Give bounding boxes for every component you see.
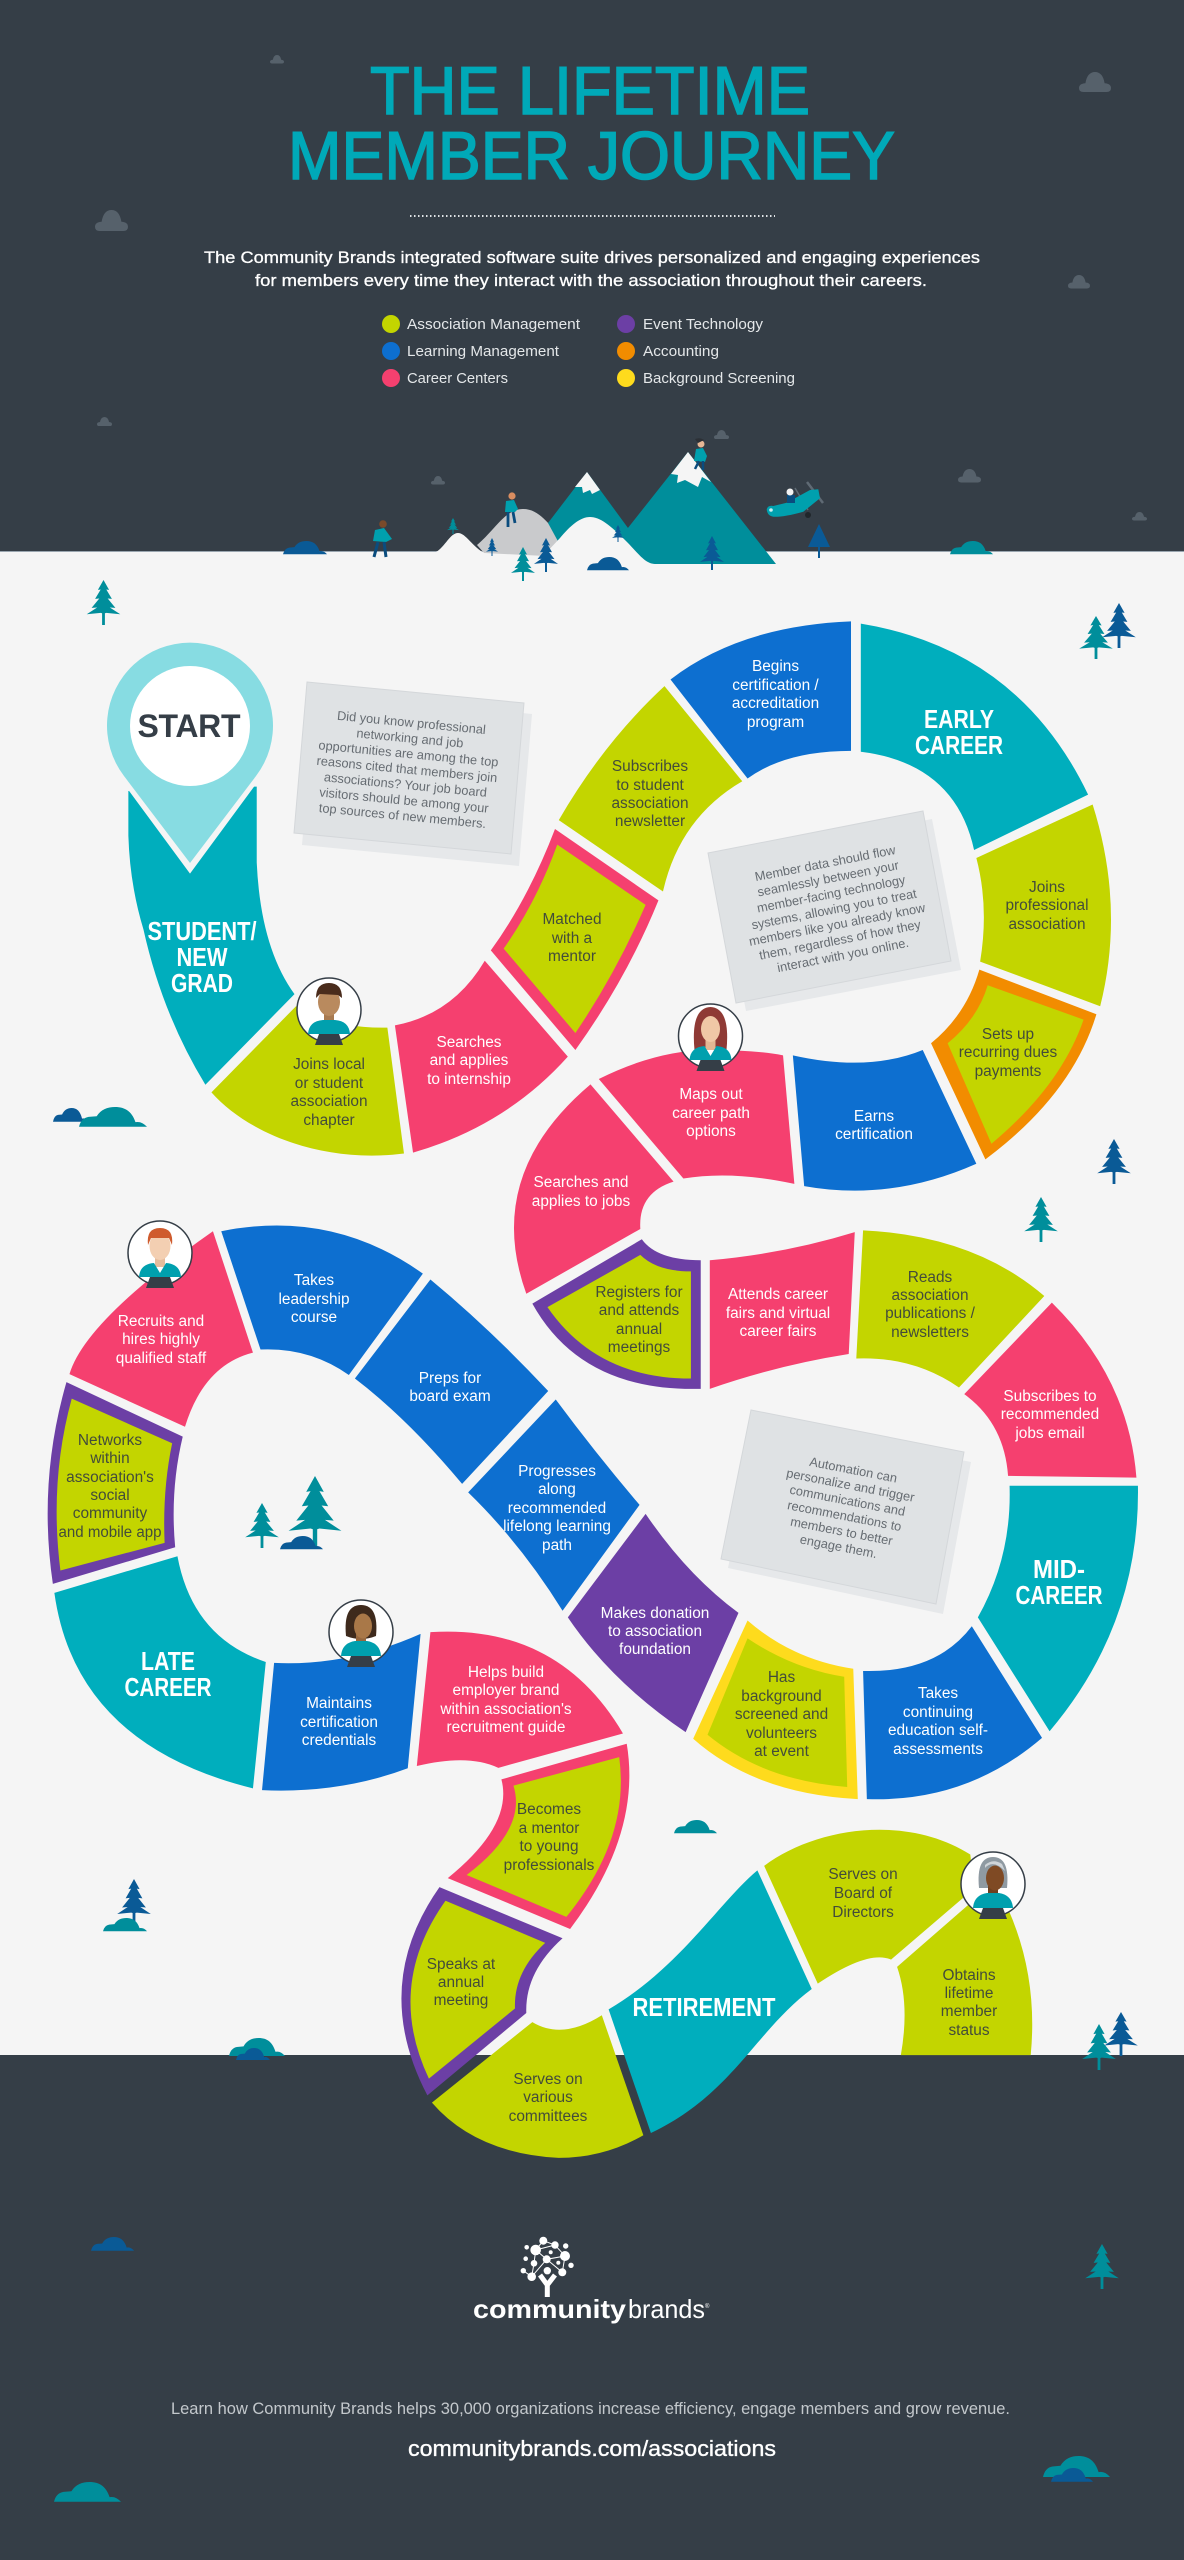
step: subscribes jobs email: jobs email — [1014, 1425, 1085, 1442]
step: helps build employer brand: Helps build — [468, 1664, 544, 1681]
note: professional networking: visitors should be among your — [319, 784, 490, 816]
step: registers annual meetings: annual — [616, 1321, 662, 1338]
step: searches jobs: Searches and — [534, 1174, 628, 1191]
step: background screened: Has — [768, 1669, 795, 1686]
step: begins certification: accreditation — [732, 695, 819, 712]
step: joins professional association: professional — [1006, 897, 1088, 914]
note: automation: communications and — [788, 1482, 907, 1519]
step: searches internship: Searches — [436, 1034, 502, 1051]
field bushes — [53, 1107, 1110, 2502]
step: reads publications: publications / — [885, 1305, 976, 1322]
step: matched with mentor — [491, 829, 658, 1050]
step: becomes a mentor: Becomes — [517, 1801, 581, 1818]
step: networks within community: association's — [66, 1469, 154, 1486]
intro text: The Community Brands integrated software suite drives personalized and engaging experiences — [204, 248, 980, 267]
step: serves on committees: various — [523, 2089, 573, 2106]
stage: early career: CAREER — [915, 730, 1003, 760]
climber on grey hill — [505, 492, 518, 527]
step: progresses learning path — [468, 1400, 640, 1611]
step: serves on board — [764, 1830, 974, 1984]
legend: Career Centers — [407, 370, 508, 387]
note: member data: interact with you online. — [776, 935, 910, 975]
step: serves on committees: Serves on — [513, 2071, 583, 2088]
stage: early career: EARLY — [924, 704, 994, 734]
note: automation: Automation can — [808, 1454, 899, 1486]
step: serves on board: Directors — [832, 1904, 894, 1921]
logo: wordmark: ® — [705, 2303, 710, 2310]
step: joins local chapter: Joins local — [293, 1056, 365, 1073]
logo: wordmark: community — [473, 2294, 627, 2324]
step: takes leadership course: Takes — [294, 1272, 334, 1289]
field trees — [87, 580, 1138, 2289]
start pin: START — [138, 708, 241, 744]
step: registers annual meetings: and attends — [599, 1302, 680, 1319]
note: professional networking: top sources of new members. — [318, 800, 487, 831]
note: member data: seamlessly between your — [756, 857, 901, 899]
note: automation — [721, 1410, 971, 1614]
note: member data: them, regardless of how they — [758, 916, 923, 963]
note: automation: members to better — [789, 1514, 895, 1548]
avatar: red-haired man — [128, 1221, 192, 1288]
intro text: for members every time they interact with the association throughout their careers. — [255, 271, 927, 290]
legend: Association Management — [407, 316, 581, 333]
step: speaks at annual meeting: meeting — [434, 1992, 488, 2009]
start pin — [107, 643, 273, 866]
stage: student / new grad: GRAD — [171, 968, 233, 998]
step: takes continuing education: education self- — [888, 1722, 988, 1739]
step: helps build employer brand — [417, 1632, 623, 1768]
step: makes donation: Makes donation — [601, 1605, 709, 1622]
plane — [767, 482, 823, 518]
step: background screened: at event — [754, 1743, 810, 1760]
step: attends career fairs — [710, 1232, 855, 1389]
step: takes leadership course: leadership — [278, 1291, 350, 1308]
header dark background — [0, 0, 1184, 551]
step: reads publications: association — [892, 1287, 968, 1304]
title: MEMBER JOURNEY — [288, 118, 895, 194]
step: subscribes newsletter: association — [612, 795, 688, 812]
step: reads publications — [856, 1230, 1044, 1387]
dotted divider — [410, 215, 775, 217]
step: subscribes jobs email: Subscribes to — [1003, 1388, 1097, 1405]
intro text — [204, 248, 980, 290]
step: attends career fairs: fairs and virtual — [726, 1305, 830, 1322]
legend: Accounting — [643, 343, 719, 360]
note: member data: members like you already know — [748, 900, 927, 949]
note: member data — [708, 811, 961, 1011]
step: preps for board exam: board exam — [409, 1388, 491, 1405]
step: registers annual meetings — [532, 1239, 701, 1389]
step: background screened: volunteers — [746, 1725, 817, 1742]
step: becomes a mentor: professionals — [504, 1857, 595, 1874]
step: subscribes newsletter — [559, 686, 742, 891]
note: professional networking: networking and job — [356, 725, 464, 751]
step: background screened: background — [741, 1688, 822, 1705]
stage: student / new grad: NEW — [176, 942, 228, 972]
step: searches internship: to internship — [427, 1071, 511, 1088]
note: member data: Member data should flow — [753, 842, 897, 884]
step: helps build employer brand: recruitment guide — [447, 1719, 565, 1736]
step: joins professional association — [976, 804, 1111, 1006]
step: joins local chapter: association — [290, 1093, 368, 1110]
step: becomes a mentor — [448, 1744, 629, 1929]
step: speaks at annual meeting: Speaks at — [427, 1956, 496, 1973]
step: subscribes jobs email — [964, 1303, 1136, 1478]
step: obtains lifetime status: status — [948, 2022, 990, 2039]
step: recruits staff: qualified staff — [116, 1350, 207, 1367]
note: professional networking: opportunities are among the top — [318, 737, 499, 770]
step: begins certification: Begins — [752, 658, 799, 675]
logo: tree icon — [521, 2237, 574, 2297]
step: sets up dues — [931, 970, 1096, 1159]
step: joins professional association: Joins — [1029, 879, 1065, 896]
stage: mid-career — [978, 1486, 1138, 1731]
step: matched with mentor: mentor — [548, 948, 596, 965]
step: maps out career path: Maps out — [679, 1086, 743, 1103]
avatar: early career woman — [678, 1004, 742, 1071]
title — [288, 53, 895, 194]
step: subscribes jobs email: recommended — [1001, 1406, 1099, 1423]
stage: student / new grad — [128, 787, 294, 1085]
stage: late career: CAREER — [124, 1672, 212, 1702]
step: progresses learning path: path — [542, 1537, 572, 1554]
note: automation: recommendations to — [786, 1497, 903, 1534]
step: progresses learning path: lifelong learning — [503, 1518, 611, 1535]
step: joins local chapter: chapter — [303, 1112, 355, 1129]
step: attends career fairs: career fairs — [740, 1323, 817, 1340]
step: earns certification: Earns — [854, 1108, 894, 1125]
step: takes leadership course — [221, 1226, 423, 1375]
step: takes continuing education — [863, 1626, 1042, 1799]
step: makes donation — [568, 1514, 738, 1732]
step: maintains credentials: certification — [300, 1714, 378, 1731]
step: background screened — [693, 1621, 858, 1799]
step: progresses learning path: Progresses — [518, 1463, 596, 1480]
walking person — [373, 520, 392, 557]
step: takes leadership course: course — [291, 1309, 337, 1326]
stage: retirement — [609, 1870, 812, 2133]
footer url: communitybrands.com/associations — [408, 2436, 776, 2461]
note: professional networking — [294, 682, 532, 866]
climber on peak — [694, 438, 707, 470]
step: obtains lifetime status: lifetime — [945, 1985, 993, 2002]
step: joins local chapter — [211, 1006, 404, 1156]
step: sets up dues: payments — [975, 1063, 1042, 1080]
step: matched with mentor: Matched — [542, 911, 602, 928]
step: recruits staff — [69, 1231, 253, 1427]
step: attends career fairs: Attends career — [728, 1286, 828, 1303]
step: subscribes newsletter: newsletter — [615, 813, 685, 830]
step: begins certification: certification / — [732, 677, 819, 694]
step: maintains credentials: credentials — [302, 1732, 377, 1749]
stage: late career: LATE — [141, 1646, 195, 1676]
step: serves on committees — [432, 2015, 643, 2158]
step: obtains lifetime status — [897, 1900, 1032, 2055]
step: serves on board: Board of — [834, 1885, 893, 1902]
step: begins certification — [671, 621, 851, 779]
step: registers annual meetings: Registers for — [595, 1284, 683, 1301]
logo: wordmark: brands — [628, 2294, 705, 2324]
step: takes continuing education: assessments — [893, 1741, 983, 1758]
step: reads publications: Reads — [908, 1269, 953, 1286]
step: helps build employer brand: employer brand — [453, 1682, 559, 1699]
mountains — [436, 452, 776, 567]
step: joins local chapter: or student — [295, 1075, 364, 1092]
avatar: woman with dark hair — [329, 1600, 393, 1667]
step: networks within community — [48, 1382, 183, 1584]
step: networks within community: Networks — [78, 1432, 142, 1449]
step: makes donation: to association — [608, 1623, 702, 1640]
step: obtains lifetime status: Obtains — [942, 1967, 996, 1984]
stage: late career — [54, 1556, 266, 1788]
title: THE LIFETIME — [370, 53, 810, 129]
header clouds — [95, 55, 1147, 520]
step: networks within community: social — [90, 1487, 130, 1504]
step: maintains credentials — [262, 1634, 421, 1791]
legend — [382, 315, 795, 387]
stage: mid-career: MID- — [1033, 1554, 1085, 1584]
stage: mid-career: CAREER — [1016, 1580, 1103, 1610]
step: obtains lifetime status: member — [941, 2003, 997, 2020]
step: speaks at annual meeting: annual — [438, 1974, 484, 1991]
step: earns certification — [793, 1050, 976, 1191]
step: maps out career path: career path — [672, 1105, 750, 1122]
note: member data: member-facing technology — [756, 872, 907, 915]
note: automation: personalize and trigger — [785, 1465, 917, 1505]
note: professional networking: Did you know professional — [336, 708, 487, 737]
step: takes continuing education: continuing — [903, 1704, 973, 1721]
step: matched with mentor: with a — [551, 930, 593, 947]
step: becomes a mentor: to young — [519, 1838, 579, 1855]
step: networks within community: and mobile app — [58, 1524, 162, 1541]
note: member data: systems, allowing you to treat — [750, 886, 918, 932]
legend: Learning Management — [407, 343, 560, 360]
step: takes continuing education: Takes — [918, 1685, 958, 1702]
footer text: Learn how Community Brands helps 30,000 organizations increase efficiency, engage members and grow revenue. — [171, 2400, 1010, 2418]
step: speaks at annual meeting — [401, 1887, 563, 2095]
step: searches jobs — [514, 1084, 674, 1294]
step: recruits staff: Recruits and — [118, 1313, 204, 1330]
legend: Background Screening — [643, 370, 795, 387]
step: searches jobs: applies to jobs — [532, 1193, 630, 1210]
footer dark background — [0, 2055, 1184, 2560]
avatar: older woman — [961, 1852, 1025, 1919]
step: begins certification: program — [747, 714, 804, 731]
step: sets up dues: Sets up — [982, 1026, 1034, 1043]
step: background screened: screened and — [735, 1706, 828, 1723]
header bushes — [283, 541, 993, 570]
step: maintains credentials: Maintains — [306, 1695, 372, 1712]
note: automation: engage them. — [799, 1531, 878, 1561]
stage: early career — [861, 624, 1088, 850]
step: recruits staff: hires highly — [122, 1331, 200, 1348]
step: registers annual meetings: meetings — [608, 1339, 671, 1356]
step: progresses learning path: recommended — [508, 1500, 606, 1517]
stage: retirement: RETIREMENT — [632, 1992, 776, 2022]
step: subscribes newsletter: Subscribes — [612, 758, 688, 775]
step: progresses learning path: along — [538, 1481, 576, 1498]
step: maps out career path — [599, 1050, 794, 1184]
stage: student / new grad: STUDENT/ — [148, 916, 256, 946]
step: joins professional association: association — [1008, 916, 1086, 933]
step: preps for board exam: Preps for — [419, 1370, 481, 1387]
step: sets up dues: recurring dues — [959, 1044, 1057, 1061]
step: searches internship — [395, 961, 568, 1153]
step: makes donation: foundation — [619, 1641, 691, 1658]
note: professional networking: associations? Your job board — [323, 769, 488, 800]
legend: Event Technology — [643, 316, 764, 333]
header trees — [447, 518, 830, 581]
step: becomes a mentor: a mentor — [519, 1820, 579, 1837]
note: professional networking: reasons cited that members join — [316, 753, 498, 785]
step: serves on board: Serves on — [828, 1866, 898, 1883]
step: networks within community: community — [73, 1505, 148, 1522]
logo: wordmark — [473, 2294, 710, 2324]
step: subscribes newsletter: to student — [616, 777, 685, 794]
step: maps out career path: options — [686, 1123, 736, 1140]
step: reads publications: newsletters — [891, 1324, 969, 1341]
avatar: student — [297, 978, 361, 1045]
step: searches internship: and applies — [430, 1052, 509, 1069]
step: preps for board exam — [355, 1279, 548, 1484]
step: helps build employer brand: within association's — [439, 1701, 572, 1718]
step: networks within community: within — [89, 1450, 130, 1467]
step: earns certification: certification — [835, 1126, 913, 1143]
step: serves on committees: committees — [509, 2108, 588, 2125]
